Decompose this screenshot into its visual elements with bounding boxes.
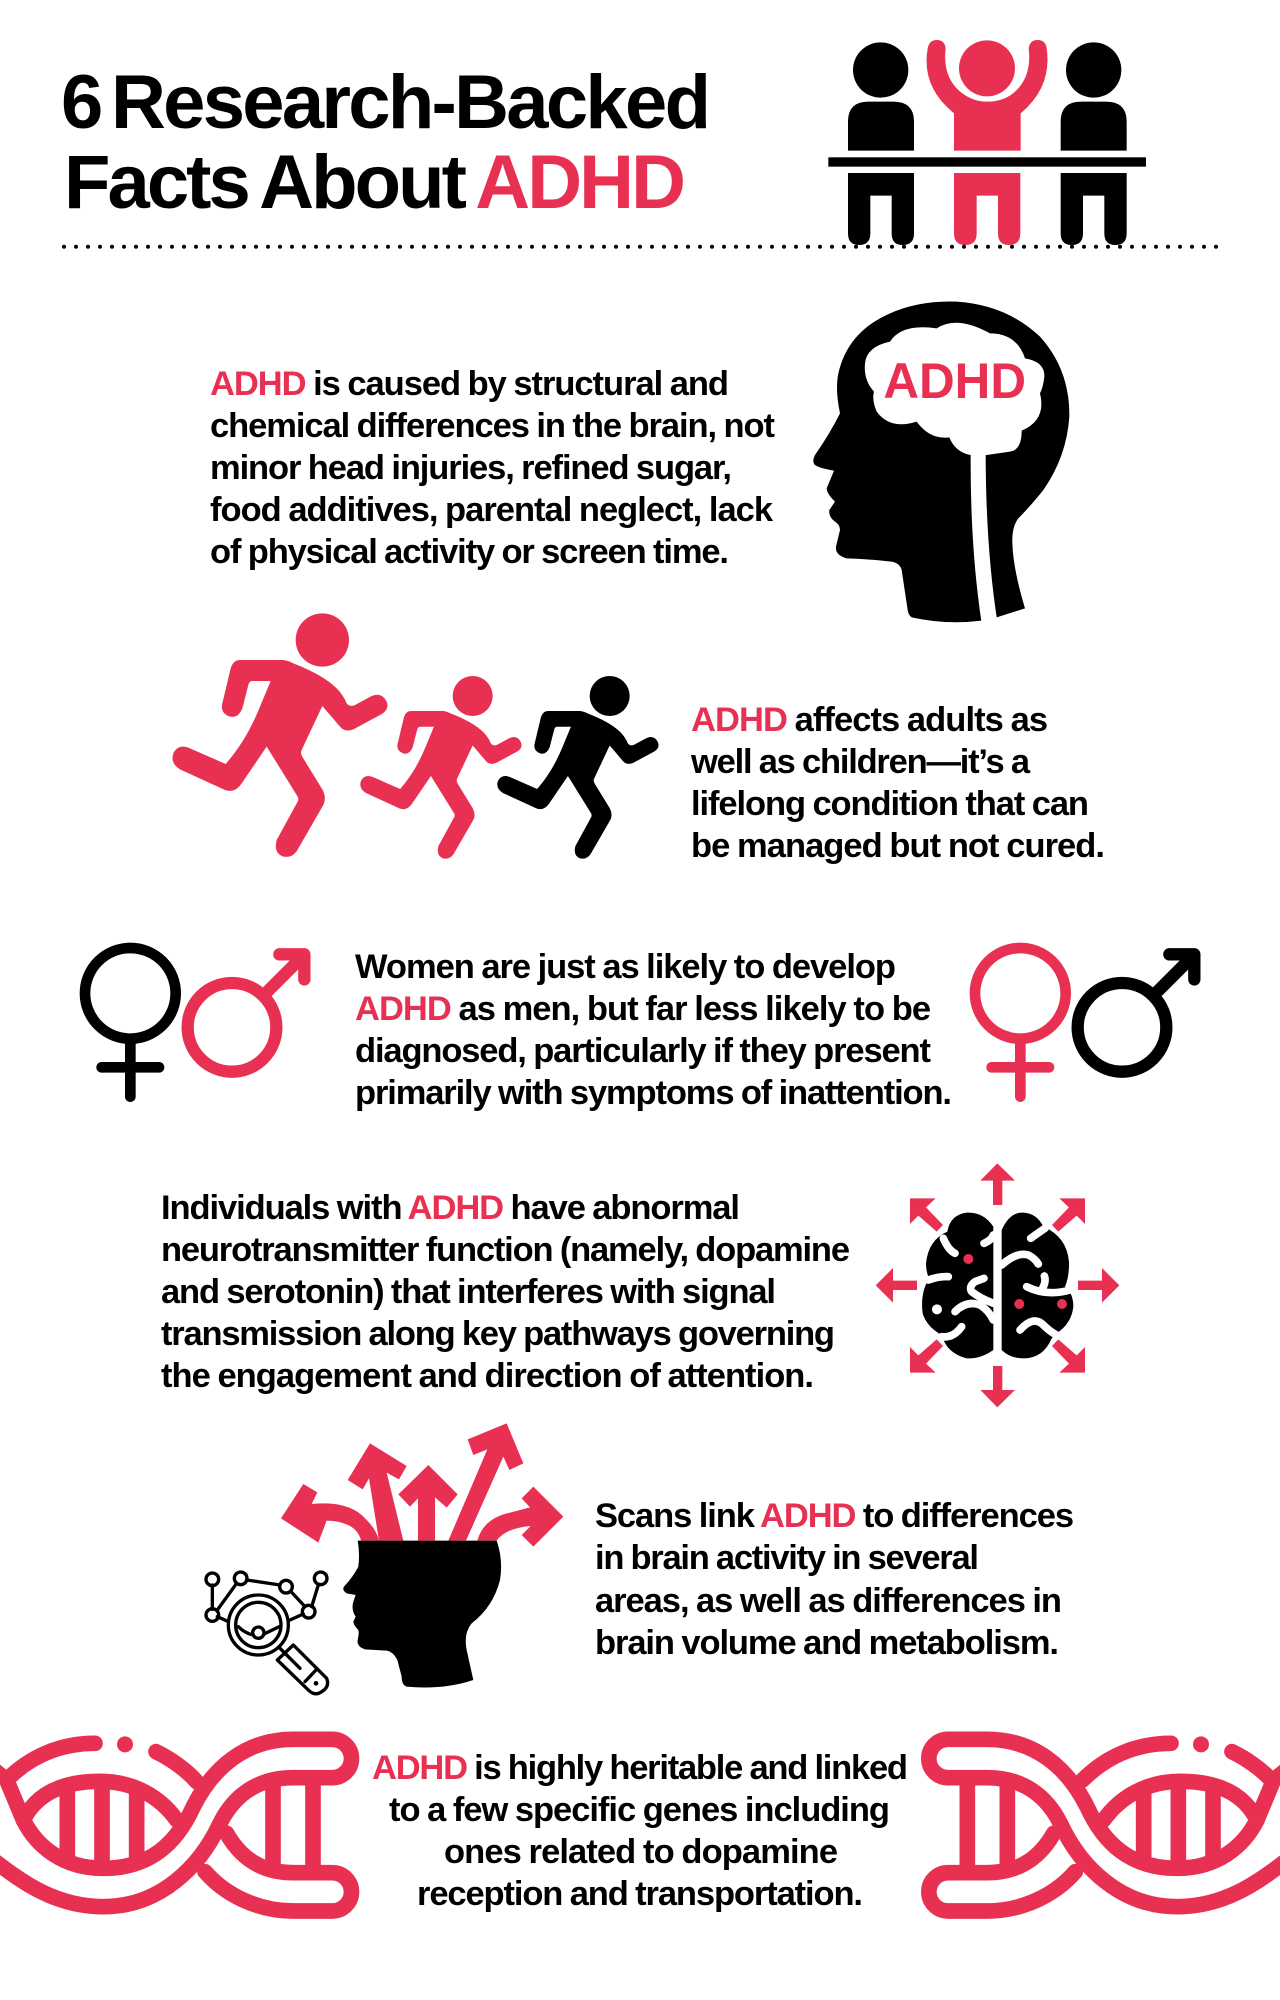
text block: fact 6: ones related to dopamine [444,1833,838,1871]
text block: fact 1 [210,365,776,571]
text block: fact 4 [161,1189,850,1395]
icon: brain with radiating arrows [876,1163,1119,1407]
title: 6 Research-Backed [61,60,711,145]
text block: fact 2: lifelong condition that can [691,785,1089,823]
text block: fact 2 [690,701,1105,865]
text block: fact 2: be managed but not cured. [691,827,1105,865]
icon: DNA helix left [0,1736,351,1911]
icon: head with arrows and magnifier [206,1423,563,1694]
text block: fact 3: Women are just as likely to develop [355,948,896,986]
icon: head silhouette with ADHD brain: ADHD [883,353,1026,409]
text block: fact 4: the engagement and direction of attention. [161,1357,814,1395]
text block: fact 5 [595,1497,1074,1662]
icon: gender symbols left [85,948,304,1097]
icon: three running figures [172,613,659,859]
text block: fact 4: neurotransmitter function (namely, dopamine [161,1231,850,1269]
text block: fact 1: of physical activity or screen time. [210,533,729,571]
text block: fact 5: in brain activity in several [595,1539,979,1577]
title: Facts About ADHD [64,140,686,225]
text block: fact 1: minor head injuries, refined sugar, [210,449,732,487]
text block: fact 2: ADHD affects adults as [691,701,1048,739]
icon: three people at a table, centre figure raising arms [828,40,1146,245]
text block: fact 5: areas, as well as differences in [595,1582,1062,1620]
text block: fact 5: Scans link ADHD to differences [595,1497,1074,1535]
icon: gender symbols right [975,948,1194,1097]
text block: fact 1: chemical differences in the brain, not [210,407,776,445]
icon: DNA helix right [929,1736,1280,1911]
text block: fact 3 [355,948,952,1112]
text block: fact 4: Individuals with ADHD have abnormal [161,1189,740,1227]
text block: fact 3: diagnosed, particularly if they present [355,1032,932,1070]
text block: fact 2: well as children—it’s a [690,743,1031,781]
text block: fact 6: reception and transportation. [417,1875,863,1913]
text block: fact 6 [372,1749,908,1913]
text block: fact 6: ADHD is highly heritable and linked [372,1749,908,1787]
text block: fact 6: to a few specific genes including [389,1791,890,1829]
text block: fact 3: ADHD as men, but far less likely to be [355,990,931,1028]
magnifier with network nodes [206,1572,328,1694]
text block: fact 3: primarily with symptoms of inattention. [355,1074,952,1112]
arrows out of the head [281,1423,563,1547]
text block: fact 4: and serotonin) that interferes with signal [161,1273,776,1311]
icon: head silhouette with ADHD brain [813,302,1069,623]
text block: fact 1: food additives, parental neglect, lack [210,491,774,529]
text block: fact 4: transmission along key pathways governing [161,1315,835,1353]
text block: fact 1: ADHD is caused by structural and [210,365,729,403]
text block: fact 5: brain volume and metabolism. [595,1624,1059,1662]
title [61,60,711,225]
